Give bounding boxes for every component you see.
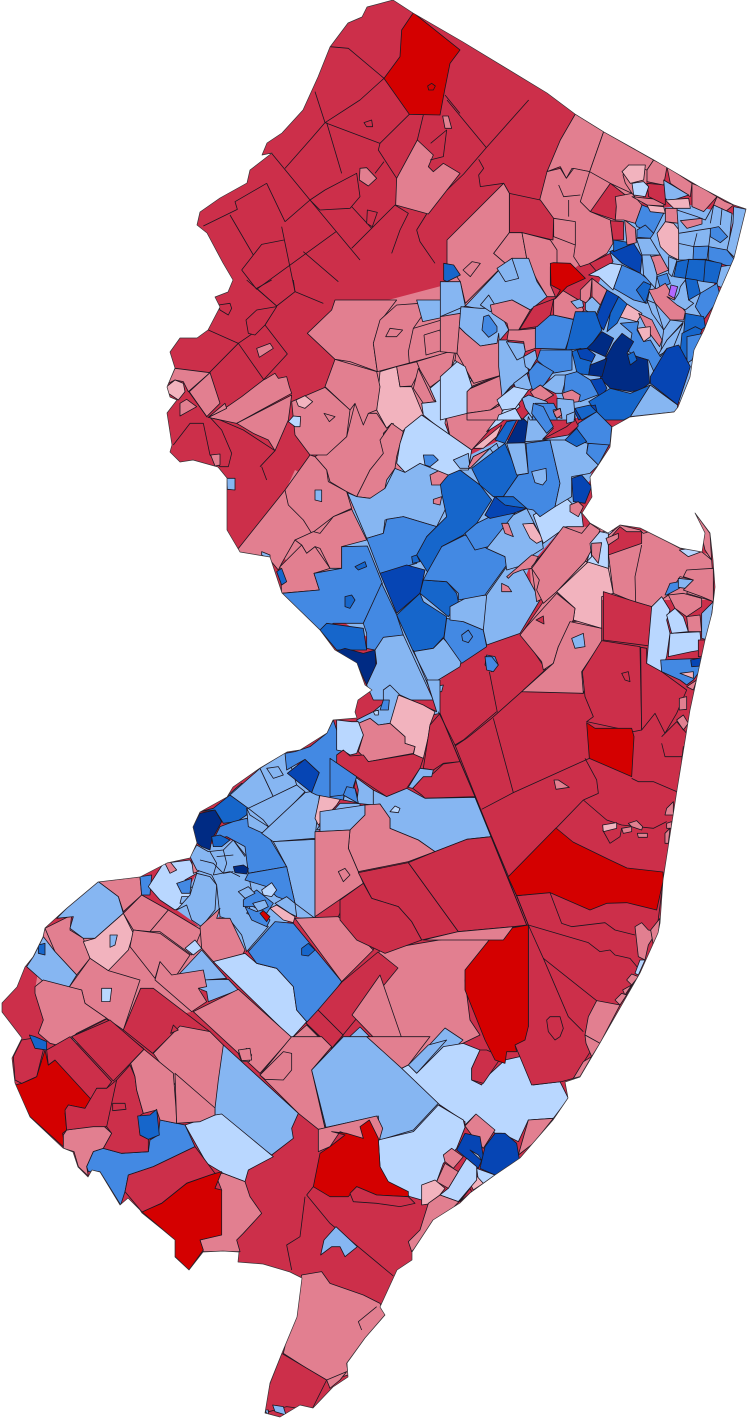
region: northeast metro counties <box>440 100 746 420</box>
region: Union and Middlesex seam <box>525 403 612 447</box>
region: west Hunterdon <box>167 280 323 480</box>
region: southern Ocean county <box>465 828 663 1085</box>
region: central counties <box>227 300 620 700</box>
region: eastern shore counties <box>413 515 713 900</box>
background tints <box>284 168 710 688</box>
region: Cumberland and Salem southwest <box>13 1020 215 1212</box>
region: southwest counties <box>27 720 373 1142</box>
region: Burlington and Salem interior <box>306 940 488 1136</box>
region: Burlington north detail <box>315 680 527 953</box>
region: Cape May, Cumberland and Atlantic <box>142 1037 568 1417</box>
region: Sussex and Warren counties <box>203 13 460 292</box>
